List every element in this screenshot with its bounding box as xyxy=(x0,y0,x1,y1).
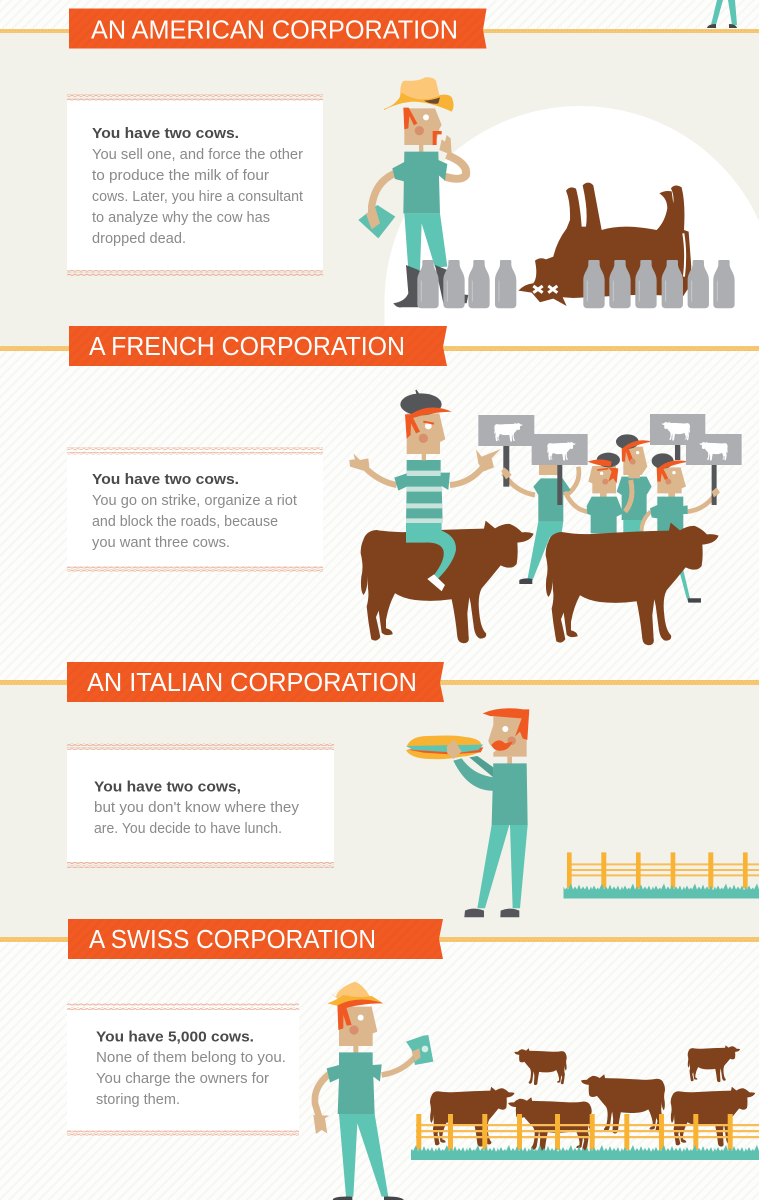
text panel: American: cows. Later, you hire a consultant xyxy=(92,188,304,205)
figure legs from previous section xyxy=(707,0,737,28)
text panel: American: dropped dead. xyxy=(92,230,186,247)
protester back centre xyxy=(616,434,653,533)
grass: Italian xyxy=(564,884,759,898)
section divider lines xyxy=(0,29,759,942)
text panel: Swiss: You charge the owners for xyxy=(96,1070,269,1087)
illustration: American farmer, dead cow and milk bottles xyxy=(358,77,735,308)
text panel: French: You have two cows. xyxy=(92,471,239,488)
text panel: Italian: but you don't know where they xyxy=(94,799,300,816)
text panel: Italian: You have two cows, xyxy=(94,778,241,796)
banner: American xyxy=(69,8,486,48)
grass: Swiss xyxy=(411,1145,759,1160)
Italian man xyxy=(453,708,529,917)
beret man xyxy=(394,390,456,591)
protest signs xyxy=(478,414,742,505)
banner: Swiss: A SWISS CORPORATION xyxy=(89,924,376,954)
text panel: Italian xyxy=(67,744,334,868)
text panel: American xyxy=(67,94,323,276)
illustration: Swiss farmer xyxy=(313,982,433,1200)
text panel: Swiss: storing them. xyxy=(96,1091,180,1108)
text panel: French: you want three cows. xyxy=(92,534,230,551)
hands on signs xyxy=(501,467,720,497)
illustration: Italian man with sandwich xyxy=(406,708,759,917)
text panel: American: to produce the milk of four xyxy=(92,167,269,184)
banner: Italian: AN ITALIAN CORPORATION xyxy=(87,667,417,697)
protester left xyxy=(503,463,579,584)
cows xyxy=(361,521,719,645)
text panel: Swiss xyxy=(67,1004,299,1136)
white circle backdrop xyxy=(384,106,759,347)
milk bottles xyxy=(417,260,735,308)
protester right xyxy=(642,453,716,603)
text panel: Swiss: None of them belong to you. xyxy=(96,1049,286,1066)
farmer xyxy=(358,77,468,307)
text panel: Italian: are. You decide to have lunch. xyxy=(94,820,282,837)
banner: Swiss xyxy=(68,919,443,959)
fence: Swiss xyxy=(416,1114,759,1150)
illustration: French strikers on cows xyxy=(349,390,742,645)
banner: Italian xyxy=(67,662,444,702)
text panel: American: to analyze why the cow has xyxy=(92,209,270,226)
beret man arms xyxy=(349,449,501,485)
fence and grass xyxy=(567,852,759,888)
text panel: American: You have two cows. xyxy=(92,125,239,142)
herd of cows xyxy=(430,1045,755,1152)
text panel: American: You sell one, and force the other xyxy=(92,146,303,163)
banner: French xyxy=(69,326,447,366)
text panel: French: You go on strike, organize a riot xyxy=(92,492,298,509)
text panel: French: and block the roads, because xyxy=(92,513,278,530)
sandwich xyxy=(406,735,483,759)
banner: French: A FRENCH CORPORATION xyxy=(89,331,405,361)
protester middle xyxy=(565,453,623,533)
banner: American: AN AMERICAN CORPORATION xyxy=(91,14,458,44)
text panel: Swiss: You have 5,000 cows. xyxy=(96,1028,254,1046)
text panel: French xyxy=(67,448,323,572)
dead cow xyxy=(518,183,691,306)
